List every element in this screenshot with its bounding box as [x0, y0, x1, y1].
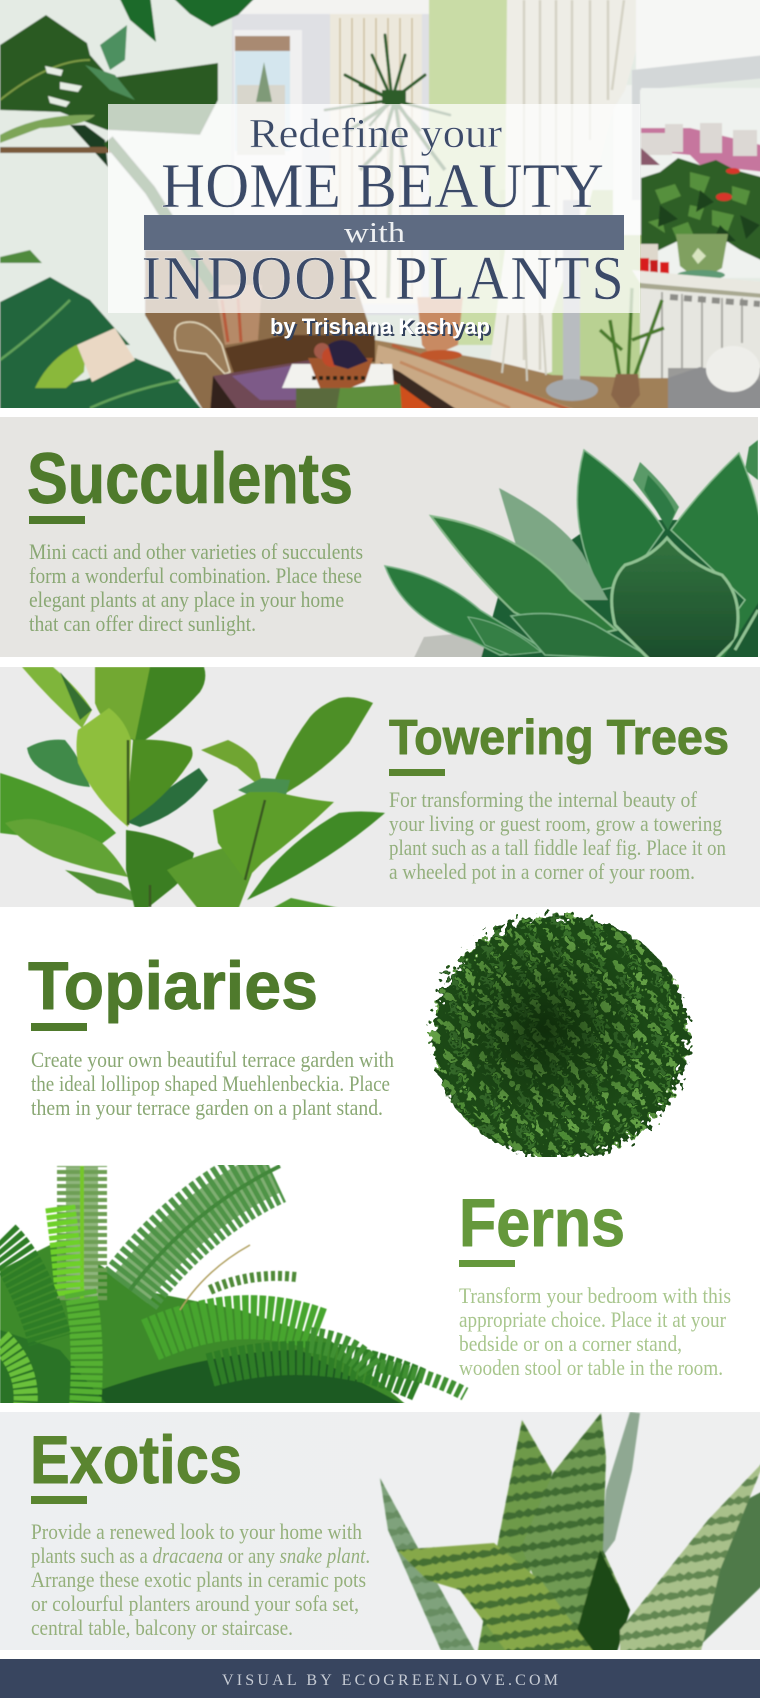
snake plant illustration	[380, 1412, 760, 1655]
heading: Towering Trees	[389, 711, 729, 765]
body text: For transforming the internal beauty of	[389, 787, 698, 812]
slate band with "with": with	[344, 218, 405, 249]
body text	[29, 539, 363, 636]
footer band	[0, 1659, 760, 1698]
panel: towering trees	[0, 667, 760, 910]
slate band with "with"	[144, 215, 624, 250]
body text	[389, 787, 726, 884]
speaker stand	[563, 200, 580, 390]
underline	[389, 769, 445, 776]
underline	[31, 1496, 87, 1504]
body text: Mini cacti and other varieties of succulents	[29, 539, 363, 564]
curtain	[491, 0, 635, 374]
heading: Succulents	[27, 440, 353, 519]
title backing panel	[108, 104, 640, 313]
footer band: VISUAL BY ECOGREENLOVE.COM	[222, 1672, 558, 1689]
upper-left leaves	[118, 0, 258, 42]
heading: Topiaries	[28, 948, 318, 1024]
body text	[31, 1519, 370, 1640]
radiator	[638, 287, 760, 379]
body text: bedside or on a corner stand,	[459, 1331, 682, 1356]
body text: or colourful planters around your sofa set,	[31, 1591, 359, 1616]
panel: exotics	[0, 1412, 760, 1655]
terracotta pot	[417, 297, 463, 352]
sofa	[145, 250, 375, 413]
curtain hem	[502, 315, 546, 381]
body text: appropriate choice. Place it at your	[459, 1307, 727, 1332]
fern illustration	[0, 1166, 465, 1408]
body text: elegant plants at any place in your home	[29, 587, 344, 612]
body text: Create your own beautiful terrace garden with	[31, 1047, 394, 1072]
coffee table	[214, 360, 312, 408]
body text: the ideal lollipop shaped Muehlenbeckia. Place	[31, 1071, 390, 1096]
body text: that can offer direct sunlight.	[29, 611, 256, 636]
body text: Provide a renewed look to your home with	[31, 1519, 362, 1544]
body text: wooden stool or table in the room.	[459, 1355, 723, 1380]
lower green wall	[546, 190, 642, 379]
heading: Ferns	[459, 1185, 625, 1261]
hero room scene	[0, 0, 760, 415]
title line: Home Beauty: HOME BEAUTY	[161, 151, 604, 221]
right window	[636, 0, 760, 70]
small palm behind title	[325, 35, 450, 130]
panel: hero photo and title	[0, 0, 760, 415]
topiary ball illustration	[420, 915, 700, 1173]
body text: Arrange these exotic plants in ceramic pots	[31, 1567, 366, 1592]
fruit basket	[308, 358, 373, 388]
body text	[31, 1047, 394, 1120]
veiled leaf inside title area	[108, 140, 215, 290]
byline: by Trishana Kashyap	[270, 314, 490, 339]
rooftops	[641, 128, 760, 172]
panel: topiaries	[28, 915, 700, 1173]
body text: Transform your bedroom with this	[459, 1283, 731, 1308]
body text: them in your terrace garden on a plant stand.	[31, 1095, 383, 1120]
lower-left monstera	[0, 250, 42, 263]
underline	[29, 516, 85, 524]
underline	[459, 1260, 515, 1267]
underline	[31, 1023, 87, 1031]
floor and carpet	[370, 339, 669, 408]
title line: Indoor Plants: INDOOR PLANTS	[142, 244, 624, 314]
heading: Exotics	[30, 1422, 242, 1498]
body text: your living or guest room, grow a towering	[389, 811, 722, 836]
body text: a wheeled pot in a corner of your room.	[389, 859, 695, 884]
body text: form a wonderful combination. Place these	[29, 563, 362, 588]
body text	[459, 1283, 731, 1380]
succulent plant illustration	[385, 440, 760, 662]
egg ornament	[706, 346, 760, 392]
panel: ferns	[0, 1166, 731, 1408]
panel: succulents	[0, 417, 760, 662]
title line: Redefine your: Redefine your	[249, 110, 502, 156]
body text: central table, balcony or staircase.	[31, 1615, 293, 1640]
fiddle leaf fig illustration	[0, 667, 385, 910]
bamboo and vase	[600, 288, 664, 378]
anthurium on the sill	[641, 158, 760, 262]
paper and magazines	[282, 364, 394, 388]
body text: plants such as a dracaena or any snake plant.	[31, 1543, 370, 1568]
